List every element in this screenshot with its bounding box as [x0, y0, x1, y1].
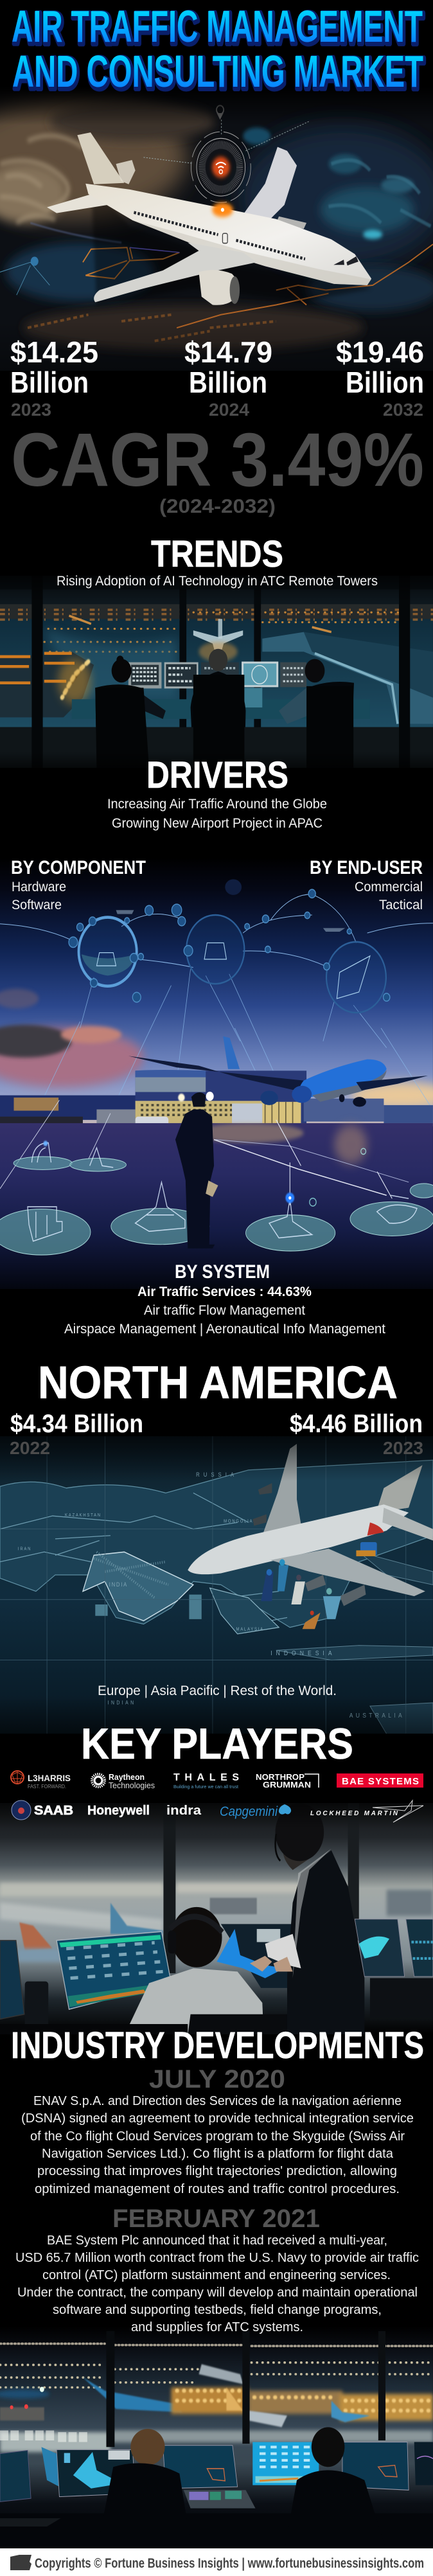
map place names: MALAYSIA: [236, 1627, 264, 1632]
title: [12, 1, 425, 98]
driver list: [107, 797, 327, 831]
paragraph: processing that improves flight trajectories' prediction, allowing: [37, 2164, 397, 2178]
development: February 2021: FEBRUARY 2021: [112, 2205, 320, 2233]
market size 2032: [336, 335, 424, 420]
paragraph: software and supporting testbeds, field change programs,: [53, 2303, 382, 2317]
map place names: IRAN: [18, 1547, 31, 1552]
segment: by component: BY COMPONENT: [11, 857, 146, 878]
logo: Northrop Grumman: NORTHROP: [256, 1772, 305, 1782]
segment: by system: BY SYSTEM: [175, 1261, 270, 1283]
segment: by system: Air traffic Flow Management: [144, 1303, 305, 1318]
paragraph: [15, 2234, 419, 2334]
logo: Saab: [12, 1800, 73, 1820]
map place names: AUSTRALIA: [349, 1711, 405, 1719]
heading: north america: NORTH AMERICA: [38, 1358, 398, 1408]
logo: Thales: Building a future we can all trust: [173, 1784, 239, 1790]
operations image: controllers with screens: [0, 1803, 433, 2037]
hero image: airplane over digital map: [0, 85, 433, 374]
development: February 2021: [15, 2205, 419, 2334]
paragraph: [21, 2094, 414, 2196]
logo: L3Harris: [11, 1771, 71, 1790]
heading: trends: TRENDS: [151, 533, 283, 575]
market size 2024: $14.79: [184, 335, 272, 369]
market size 2024: [184, 335, 272, 420]
heading: drivers: DRIVERS: [146, 754, 288, 796]
map place names: INDIAN: [108, 1700, 136, 1706]
market size 2023: [10, 335, 98, 420]
paragraph: of the Co flight Cloud Services program to the Skyguide (Swiss Air: [30, 2129, 405, 2144]
logo: Capgemini: Capgemini: [220, 1804, 278, 1819]
map place names: INDONESIA: [270, 1649, 336, 1657]
logo: Thales: [173, 1772, 239, 1790]
north america values: $4.34 Billion: [10, 1410, 143, 1438]
heading: key players: KEY PLAYERS: [81, 1719, 353, 1768]
north america values: 2022: [10, 1438, 50, 1458]
paragraph: USD 65.7 Million worth contract from the U.S. Navy to provide air traffic: [15, 2251, 419, 2265]
logo: Honeywell: Honeywell: [87, 1804, 150, 1818]
driver list: Growing New Airport Project in APAC: [112, 816, 323, 831]
logo: Northrop Grumman: [256, 1772, 319, 1790]
map place names: RUSSIA: [196, 1471, 238, 1478]
segment: by end-user: Commercial: [355, 880, 423, 894]
trend text: Rising Adoption of AI Technology in ATC Remote Towers: [57, 574, 378, 589]
segment: by component: [11, 857, 146, 912]
regional map image with airplane: [0, 1436, 433, 1734]
segmentation image: airport apron with holograms: [0, 855, 433, 1290]
key players logos: [11, 1771, 423, 1822]
segment: by end-user: [310, 857, 423, 912]
market size 2024: Billion: [189, 366, 267, 399]
logo: Raytheon Technologies: Technologies: [109, 1781, 155, 1790]
market size 2023: $14.25: [10, 335, 98, 369]
logo: L3Harris: L3HARRIS: [28, 1773, 71, 1783]
other regions: Europe | Asia Pacific | Rest of the World.: [98, 1683, 337, 1698]
logo: Raytheon Technologies: Raytheon: [109, 1772, 145, 1782]
map place names: [18, 1471, 405, 1719]
development: July 2020: [21, 2065, 414, 2196]
market size 2032: 2032: [383, 400, 423, 420]
logo: Lockheed Martin: [310, 1800, 423, 1822]
paragraph: ENAV S.p.A. and Direction des Services de la navigation aérienne: [33, 2094, 402, 2108]
segment: by system: Airspace Management | Aeronautical Info Management: [64, 1322, 385, 1337]
paragraph: and supplies for ATC systems.: [131, 2320, 303, 2334]
segment: by end-user: Tactical: [379, 898, 423, 912]
paragraph: optimized management of routes and traffic control procedures.: [35, 2182, 400, 2196]
segment: by system: [64, 1261, 385, 1337]
logo: BAE Systems: BAE SYSTEMS: [342, 1776, 419, 1787]
development: July 2020: JULY 2020: [149, 2065, 285, 2093]
heading: trends: [57, 533, 378, 589]
map place names: INDIA: [109, 1581, 128, 1588]
market size 2023: Billion: [10, 366, 89, 399]
operations image: night control room: [0, 2326, 433, 2552]
segment: by system: Air Traffic Services : 44.63%: [137, 1284, 312, 1299]
segment: by component: Hardware: [12, 880, 66, 894]
trends image: control tower at night: [0, 576, 433, 770]
logo: Saab: SAAB: [34, 1804, 73, 1818]
segment: by component: Software: [12, 898, 62, 912]
driver list: Increasing Air Traffic Around the Globe: [107, 797, 327, 812]
icon: Fortune Business Insights logo: [10, 2555, 31, 2570]
market size 2024: 2024: [209, 400, 249, 420]
CAGR callout: (2024-2032): [159, 495, 276, 517]
heading: drivers: [107, 754, 327, 831]
logo: Indra: indra: [166, 1804, 202, 1818]
paragraph: Navigation Services Ltd.). Co flight is a platform for flight data: [42, 2147, 394, 2161]
footer: [0, 2548, 433, 2576]
north america values: [10, 1410, 423, 1458]
map place names: MONGOLIA: [224, 1519, 253, 1524]
logo: Raytheon Technologies: [92, 1772, 155, 1790]
paragraph: Under the contract, the company will develop and maintain operational: [17, 2286, 418, 2300]
logo: L3Harris: FAST. FORWARD.: [28, 1784, 66, 1790]
paragraph: (DSNA) signed an agreement to provide technical integration service: [21, 2111, 414, 2126]
logo: BAE Systems: [337, 1773, 423, 1788]
market size 2023: 2023: [11, 400, 51, 420]
north america values: 2023: [383, 1438, 423, 1458]
market size 2032: $19.46: [336, 335, 424, 369]
paragraph: control (ATC) platform sustainment and engineering services.: [42, 2268, 391, 2282]
map place names: KAZAKHSTAN: [65, 1513, 102, 1518]
logo: Lockheed Martin: LOCKHEED MARTIN: [310, 1810, 398, 1817]
logo: Thales: THALES: [173, 1772, 239, 1783]
logo: Northrop Grumman: GRUMMAN: [263, 1780, 311, 1790]
paragraph: BAE System Plc announced that it had received a multi-year,: [47, 2234, 387, 2248]
